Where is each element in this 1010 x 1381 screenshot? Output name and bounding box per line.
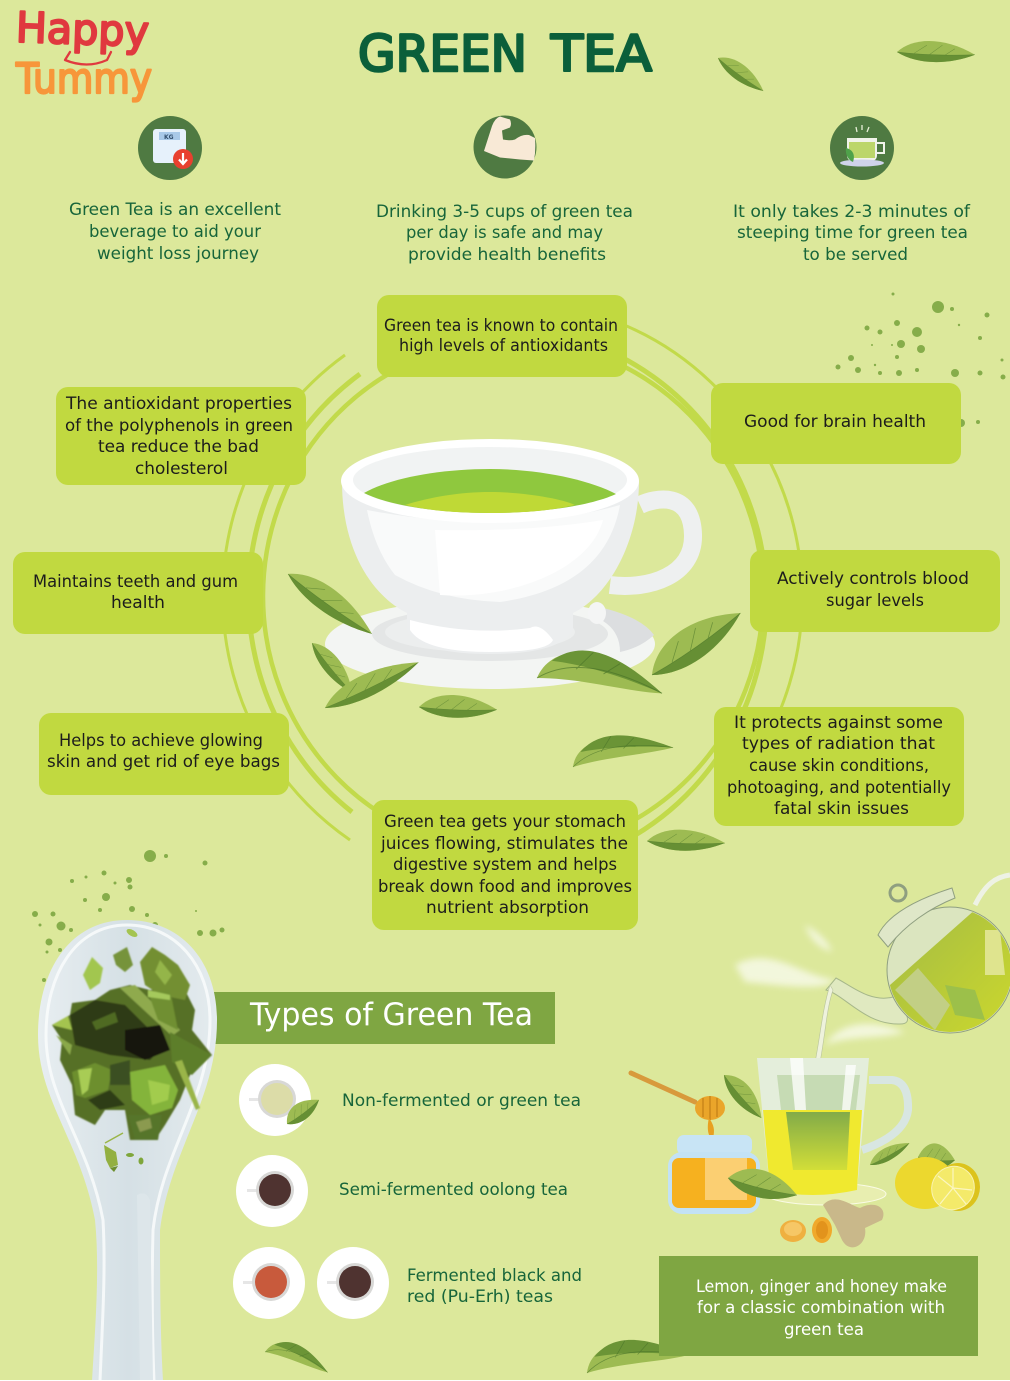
text: fermented: [407, 1266, 582, 1306]
panel: cholesterol: of the polyphenols in green: [65, 416, 293, 435]
leaf beside mug: [866, 1137, 912, 1170]
ginger root and slices: [780, 1199, 883, 1247]
cup: black tea: [317, 1247, 389, 1319]
paint splatter upper right: [836, 292, 1006, 427]
banner: types of green tea: [210, 992, 555, 1044]
panel: brain health: Good for brain health: [744, 412, 926, 431]
panel: cholesterol: [56, 387, 306, 485]
lemons: [895, 1142, 983, 1218]
logo: Happy Tummy: Tummy: [15, 54, 152, 103]
loose leaf by digestion panel: [647, 829, 725, 852]
panel: digestion: digestive system and helps: [393, 855, 617, 874]
panel: digestion: [372, 800, 638, 930]
panel: radiation: It protects against some: [734, 713, 943, 732]
icon: weight scale: [138, 116, 202, 180]
title: TEA: [550, 25, 652, 83]
panel: radiation: photoaging, and potentially: [727, 778, 951, 797]
icon: tea cup: [830, 116, 894, 180]
panel: antioxidants: [377, 295, 627, 377]
caption box: lemon ginger honey: Lemon, ginger and honey make: [696, 1277, 947, 1296]
text: steeping time: steeping time for green tea: [737, 223, 968, 242]
loose leaf below cup: [419, 694, 497, 719]
text: weight loss: [69, 200, 282, 263]
panel: cholesterol: cholesterol: [135, 459, 228, 478]
text: steeping time: It only takes 2-3 minutes of: [733, 202, 971, 221]
decorative leaf top right: [897, 40, 975, 63]
text: weight loss: beverage to aid your: [89, 222, 261, 241]
steam: [735, 925, 905, 1045]
panel: brain health: [711, 383, 961, 464]
leaf near jar: [718, 1068, 770, 1123]
panel: radiation: [714, 707, 964, 826]
caption box: lemon ginger honey: [659, 1256, 978, 1356]
caption box: lemon ginger honey: for a classic combination with: [697, 1298, 945, 1317]
glass mug of green tea: [757, 1058, 908, 1205]
teapot pouring tea: [813, 875, 1010, 1073]
panel: digestion: juices flowing, stimulates the: [380, 834, 628, 853]
panel: blood sugar: [750, 550, 1000, 632]
panel: teeth and gum: [13, 552, 263, 634]
panel: digestion: nutrient absorption: [426, 898, 589, 917]
caption box: lemon ginger honey: green tea: [784, 1320, 864, 1339]
panel: digestion: break down food and improves: [378, 877, 632, 896]
honey jar and dipper: [631, 1073, 760, 1214]
loose leaf right of cup: [569, 725, 673, 767]
title: [358, 25, 652, 83]
panel: digestion: Green tea gets your stomach: [384, 812, 626, 831]
spoon with dried tea leaves: [38, 920, 217, 1381]
text: daily cups: per day is safe and may: [406, 223, 603, 242]
text: fermented: red (Pu-Erh) teas: [407, 1287, 553, 1306]
icon: flexed arm: [474, 116, 536, 178]
panel: radiation: cause skin conditions,: [749, 756, 929, 775]
panel: antioxidants: high levels of antioxidants: [399, 336, 608, 355]
logo: Happy Tummy: Happy: [15, 3, 150, 56]
leaf bottom centre: [265, 1336, 333, 1373]
logo: Happy Tummy: [15, 3, 152, 103]
cup: oolong tea: [236, 1155, 308, 1227]
text: weight loss: weight loss journey: [97, 244, 259, 263]
panel: glowing skin: skin and get rid of eye bags: [47, 752, 280, 771]
text: daily cups: provide health benefits: [408, 245, 606, 264]
concentric rings around cup: [223, 316, 802, 860]
cup: red tea: [233, 1247, 305, 1319]
panel: cholesterol: The antioxidant properties: [65, 394, 292, 413]
title: GREEN: [358, 25, 527, 83]
panel: radiation: types of radiation that: [742, 734, 936, 753]
panel: glowing skin: Helps to achieve glowing: [59, 731, 263, 750]
panel: radiation: fatal skin issues: [774, 799, 909, 818]
text: non-fermented: Non-fermented or green tea: [342, 1091, 581, 1110]
panel: blood sugar: Actively controls blood: [777, 569, 969, 588]
text: daily cups: [376, 202, 633, 264]
text: steeping time: [733, 202, 971, 264]
text: oolong: Semi-fermented oolong tea: [339, 1180, 568, 1199]
decorative leaf top: [714, 50, 769, 96]
panel: antioxidants: Green tea is known to contain: [384, 316, 618, 335]
panel: glowing skin: [39, 713, 289, 795]
panel: cholesterol: tea reduce the bad: [98, 437, 259, 456]
text: fermented: Fermented black and: [407, 1266, 582, 1285]
paint splatter lower left: [32, 850, 224, 982]
banner: types of green tea: Types of Green Tea: [249, 997, 533, 1033]
panel: teeth and gum: Maintains teeth and gum: [33, 572, 238, 591]
text: weight loss: Green Tea is an excellent: [69, 200, 282, 219]
icon: weight scale: KG: [164, 134, 174, 141]
text: steeping time: to be served: [803, 245, 908, 264]
panel: teeth and gum: health: [111, 593, 165, 612]
leaf over jar: [725, 1163, 801, 1206]
cup: non-fermented tea: [239, 1064, 323, 1136]
panel: blood sugar: sugar levels: [826, 591, 924, 610]
leaf behind caption: [583, 1330, 688, 1373]
leaf cluster on saucer: [282, 563, 749, 716]
central tea cup illustration: [325, 439, 693, 689]
text: daily cups: Drinking 3-5 cups of green tea: [376, 202, 633, 221]
